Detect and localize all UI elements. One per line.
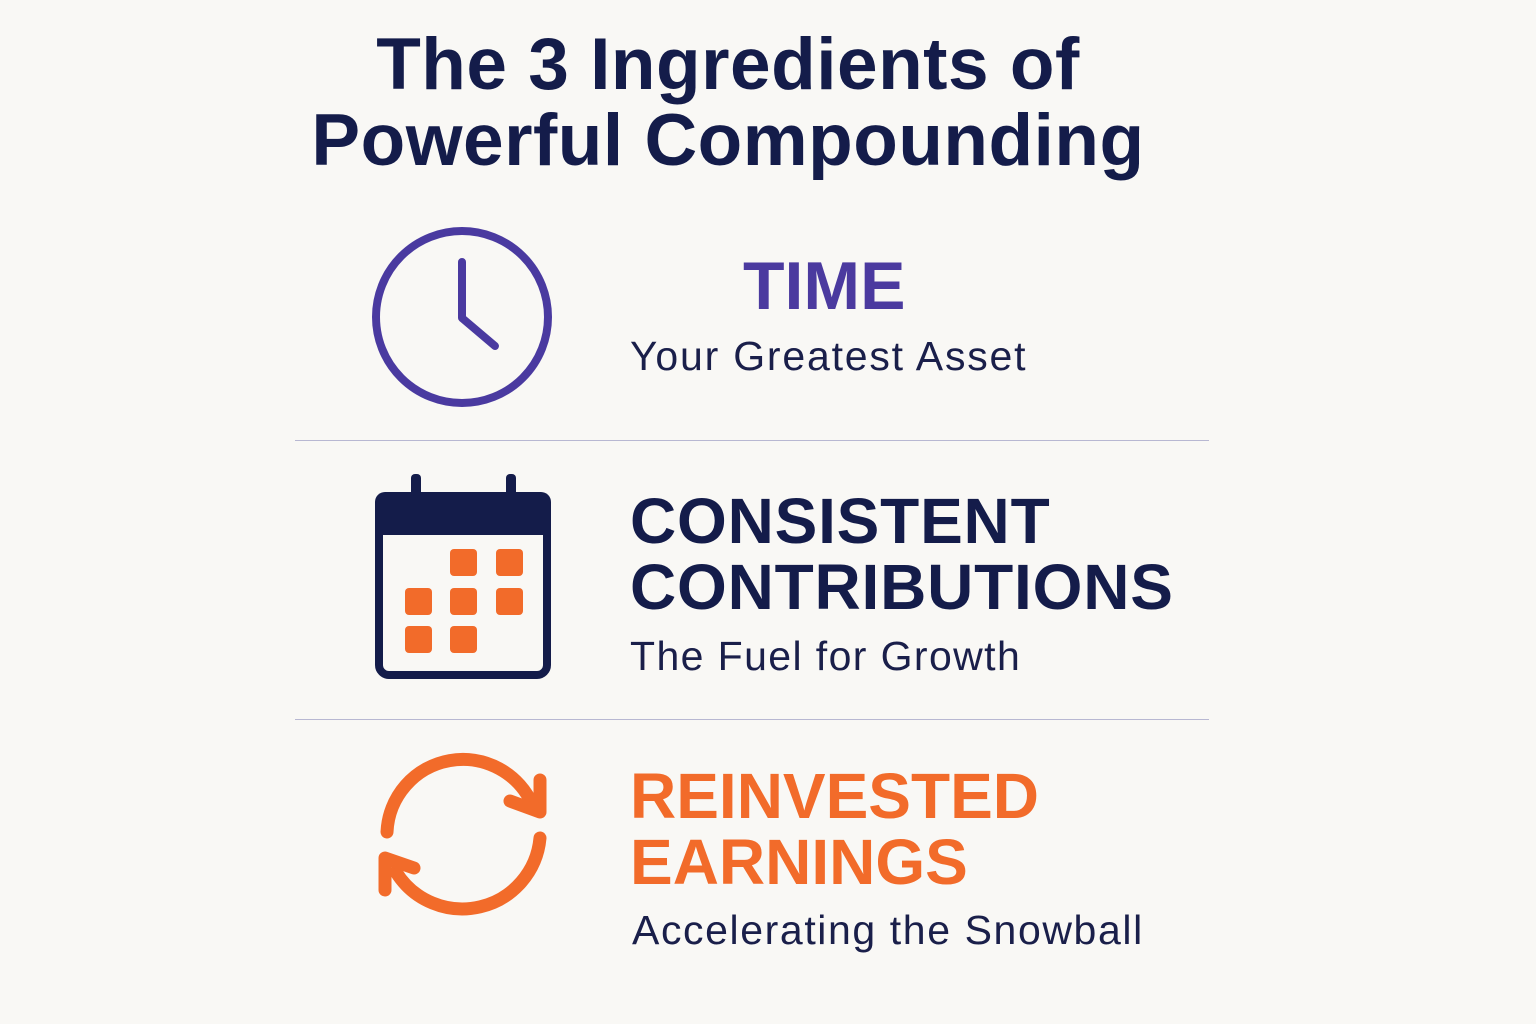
heading: reinvested earnings: REINVESTED [630, 760, 1039, 832]
icon: clock [372, 227, 552, 407]
heading: consistent contributions: CONTRIBUTIONS [630, 551, 1174, 623]
text: earnings subtitle: Accelerating the Snowball [632, 907, 1144, 953]
heading: consistent contributions [630, 485, 1174, 623]
text: contributions subtitle: The Fuel for Growth [630, 633, 1021, 679]
heading: reinvested earnings [630, 760, 1039, 898]
icon: calendar [375, 474, 551, 679]
text: time subtitle: Your Greatest Asset [630, 333, 1027, 379]
heading: reinvested earnings: EARNINGS [630, 826, 968, 898]
title [311, 24, 1145, 181]
title: Powerful Compounding [311, 100, 1145, 181]
heading: consistent contributions: CONSISTENT [630, 485, 1050, 557]
icon: reinvest arrows [378, 752, 546, 916]
heading: time: TIME [743, 248, 905, 324]
title: The 3 Ingredients of [376, 24, 1080, 105]
